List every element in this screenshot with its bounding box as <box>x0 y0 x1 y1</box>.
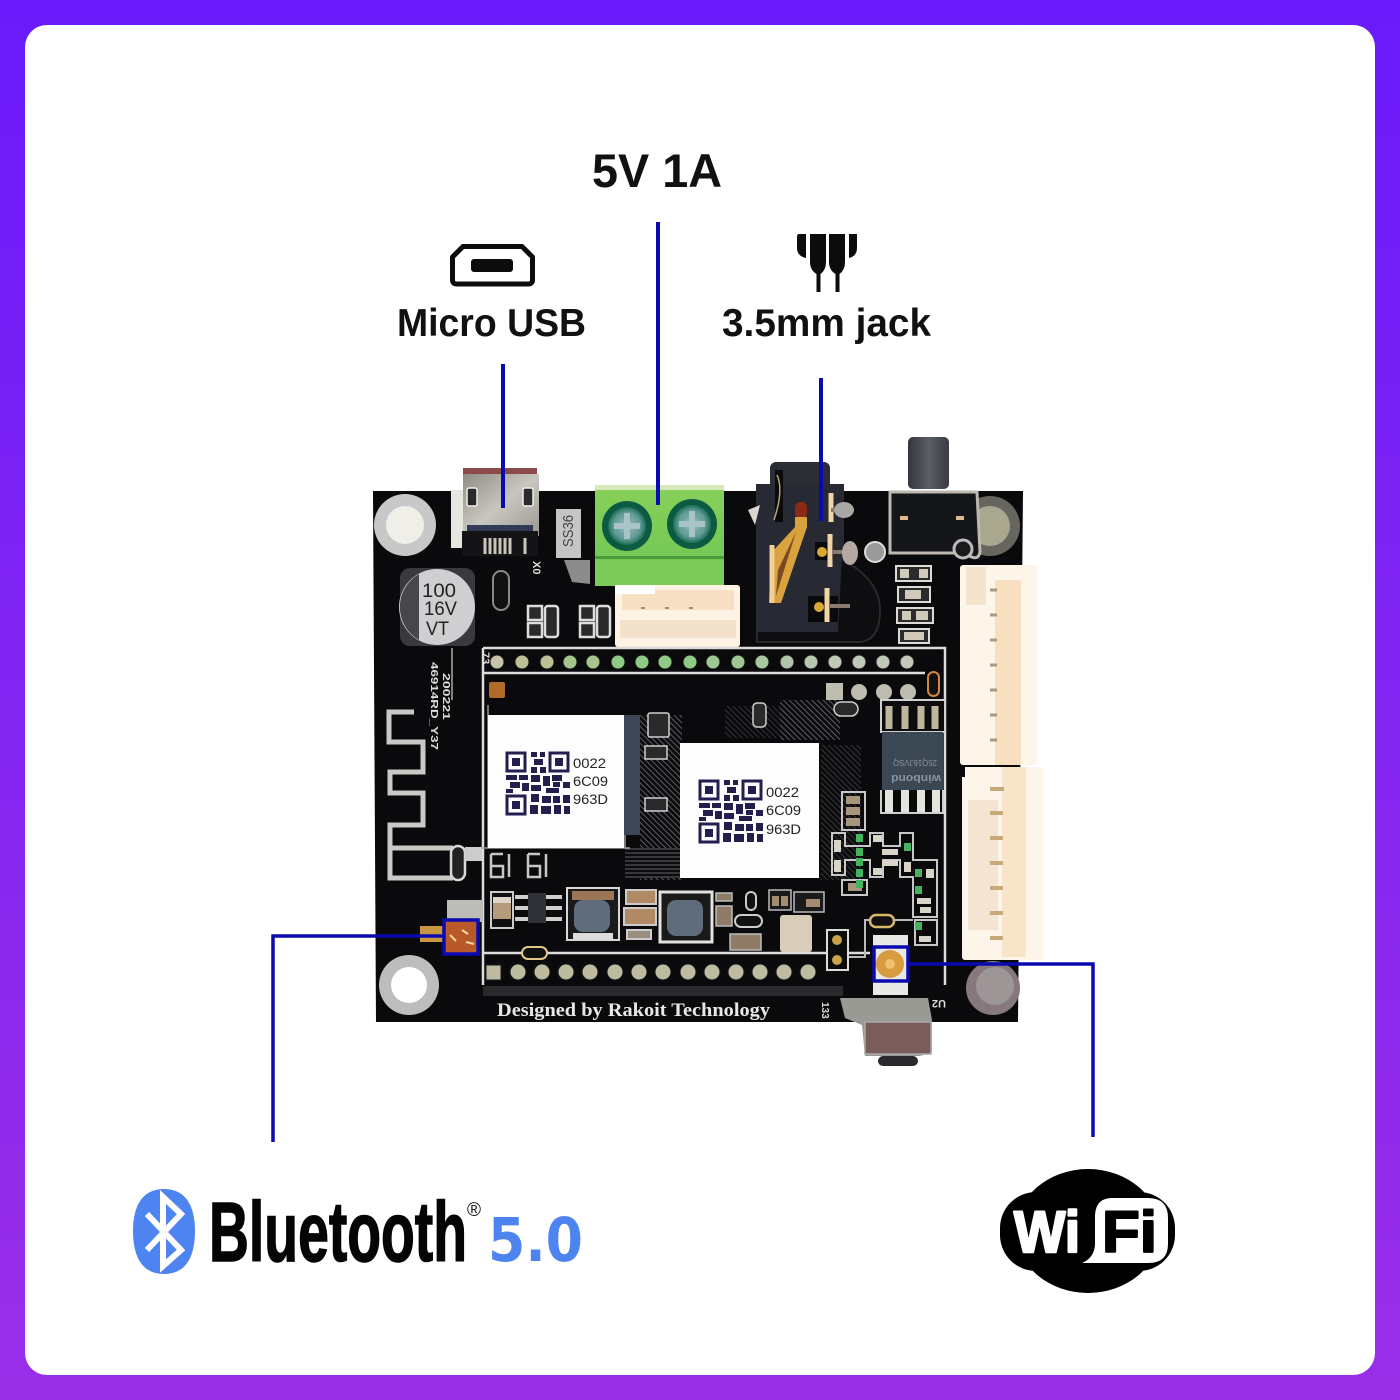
pads: left pair <box>528 606 610 637</box>
icon: Bluetooth rune <box>133 1189 195 1274</box>
heading: 5V 1A: 5V 1A <box>592 144 722 197</box>
leader line: 5V 1A <box>656 222 660 505</box>
left capacitor <box>491 892 513 928</box>
logo: Bluetooth 5.0 <box>133 1185 583 1279</box>
silkscreen: 73: 73 <box>479 652 491 664</box>
small gold via <box>489 682 505 698</box>
flash chip: 25Q16JVSQ <box>893 758 937 767</box>
QR sticker: left <box>488 715 624 848</box>
module outline <box>483 648 945 985</box>
circuit board <box>373 437 1043 1066</box>
capacitors right of inductors <box>716 890 824 950</box>
flash chip: winbond <box>891 772 942 784</box>
tactile button <box>865 437 980 562</box>
RF pad outline <box>849 920 913 957</box>
audio jack <box>748 462 880 642</box>
leader line: 3.5mm jack <box>819 378 823 521</box>
chip antenna pad: bluetooth <box>420 900 483 955</box>
icon: micro USB <box>452 246 532 284</box>
inductor left <box>567 888 619 940</box>
screw terminal <box>595 485 724 586</box>
registered mark: ® <box>467 1200 481 1221</box>
white header connector <box>615 585 740 647</box>
label: 3.5mm jack: 3.5mm jack <box>722 302 931 345</box>
module header pins: bottom <box>486 964 816 980</box>
mounting hole: top right <box>960 496 1020 556</box>
leader line: micro USB <box>501 364 505 508</box>
QR sticker: right: 963D <box>766 822 801 837</box>
lower strip <box>483 986 843 996</box>
capacitor 100uF 16V: VT <box>426 619 449 640</box>
diode SS36: SS36 <box>560 515 577 547</box>
second pin row <box>826 683 916 700</box>
antenna date text: 46914RD_Y37 <box>428 662 439 751</box>
logo: WiFi: Wi <box>1014 1200 1080 1265</box>
oval gold pad <box>928 672 939 696</box>
SMD parts near jack <box>896 566 933 643</box>
component outline: oval pad <box>493 571 509 610</box>
module header pins: top <box>490 655 914 669</box>
IR receiver <box>840 998 932 1066</box>
icon: 3.5mm jack <box>797 234 857 292</box>
small parts by stickers <box>645 702 858 811</box>
capacitor 100uF 16V <box>399 568 475 646</box>
trace fields <box>482 700 861 880</box>
oval pad <box>522 947 547 959</box>
antenna trace <box>389 712 453 878</box>
chip inductor near antenna <box>451 846 482 880</box>
oval gold pad near RF <box>870 915 894 927</box>
QR sticker: right: 0022 <box>766 785 799 800</box>
antenna date text: 200221 <box>440 673 451 721</box>
oval pads near crystal <box>735 892 762 927</box>
wordmark: Bluetooth <box>209 1185 467 1279</box>
QR sticker: left: 0022 <box>573 756 606 771</box>
label: Micro USB: Micro USB <box>397 302 586 345</box>
crystal <box>780 915 812 952</box>
silkscreen: designer credit: Designed by Rakoit Technology <box>497 1000 771 1021</box>
version: 5.0 <box>488 1205 583 1276</box>
capacitor 100uF 16V: 100 <box>422 581 456 602</box>
QR sticker: right: 6C09 <box>766 803 801 818</box>
filter component cluster <box>832 792 937 945</box>
twin capacitors <box>624 890 656 939</box>
diode SS36 <box>556 509 590 584</box>
leader line: WiFi <box>874 947 1093 1137</box>
tan parts in outlines <box>772 896 820 907</box>
silkscreen: U2: U2 <box>932 997 946 1009</box>
silkscreen: X0: X0 <box>530 561 542 574</box>
mounting hole: top left <box>374 494 436 556</box>
silkscreen 61 marks <box>491 854 546 877</box>
QR sticker: left: 6C09 <box>573 774 608 789</box>
micro USB connector <box>451 468 539 556</box>
logo: WiFi <box>1000 1169 1175 1293</box>
antenna date text <box>428 662 451 751</box>
RF connector: wifi <box>876 950 904 978</box>
QR sticker: right <box>680 743 819 878</box>
inductor right <box>660 892 712 942</box>
mounting hole: bottom right <box>966 961 1020 1015</box>
capacitor 100uF 16V: 16V <box>424 599 457 620</box>
flash chip <box>881 700 945 813</box>
board substrate <box>373 491 1023 1022</box>
test pads <box>827 930 848 970</box>
silkscreen: 133: 133 <box>819 1002 830 1019</box>
silkscreen line <box>451 648 453 700</box>
leader line: Bluetooth <box>273 920 478 1142</box>
right connectors <box>955 565 1043 960</box>
regulator chip <box>515 893 562 923</box>
mounting hole: bottom left <box>379 955 439 1015</box>
QR sticker: left: 963D <box>573 792 608 807</box>
power section <box>483 888 913 970</box>
logo: WiFi: Fi <box>1102 1200 1157 1265</box>
RF connector base <box>873 935 908 995</box>
